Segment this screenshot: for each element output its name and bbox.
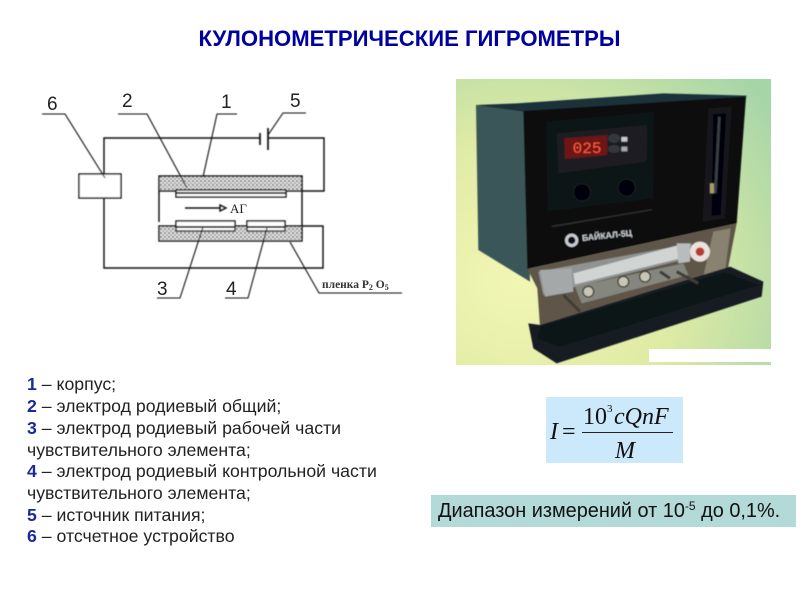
legend text: 6 – отсчетное устройство bbox=[27, 526, 235, 546]
housing top hatched bbox=[159, 176, 302, 191]
metal bar bbox=[538, 243, 695, 295]
title: КУЛОНОМЕТРИЧЕСКИЕ ГИГРОМЕТРЫ bbox=[198, 26, 621, 51]
housing walls bbox=[159, 191, 302, 226]
legend text bbox=[27, 374, 377, 546]
white strip bbox=[649, 349, 771, 362]
label: P2O5 film: 5 bbox=[385, 283, 389, 292]
legend text: 5 – источник питания; bbox=[27, 505, 205, 525]
label: P2O5 film: пленка P bbox=[322, 279, 369, 291]
diagram labels: 6 bbox=[47, 94, 58, 115]
electrode film lines bbox=[176, 193, 286, 227]
display recess bbox=[546, 112, 654, 212]
electrode 2 bbox=[176, 190, 286, 197]
red display bbox=[564, 135, 607, 159]
formula: 10 bbox=[583, 404, 607, 430]
control panel bbox=[575, 263, 688, 303]
photo background bbox=[456, 79, 771, 365]
formula bbox=[546, 397, 683, 463]
formula: cQnF bbox=[614, 404, 669, 430]
legend text: 2 – электрод родиевый общий; bbox=[27, 396, 281, 416]
electrode 4 bbox=[247, 221, 285, 231]
diagram labels: 4 bbox=[226, 279, 237, 300]
label: P2O5 film: O bbox=[373, 279, 385, 291]
wiring bbox=[104, 138, 324, 268]
clamp right bbox=[677, 243, 690, 263]
top edge bbox=[476, 93, 747, 112]
legend text: 1 – корпус; bbox=[27, 374, 116, 394]
front face bbox=[523, 97, 746, 269]
electrode 3 bbox=[176, 221, 235, 231]
box 6: readout device bbox=[79, 174, 121, 198]
divider bbox=[552, 209, 652, 227]
diagram labels bbox=[47, 91, 301, 300]
legend text: чувствительного элемента; bbox=[27, 483, 251, 503]
flowmeter bbox=[703, 107, 732, 222]
buttons bbox=[608, 134, 620, 143]
side panel bbox=[476, 105, 530, 282]
label: P2O5 film: 2 bbox=[369, 283, 373, 292]
gauge bbox=[690, 242, 710, 262]
icon: battery bbox=[260, 128, 268, 150]
device: 025 bbox=[573, 140, 601, 158]
legend text: чувствительного элемента; bbox=[27, 440, 251, 460]
measurement range callout: Диапазон измерений от 10-5 до 0,1%. bbox=[438, 499, 780, 522]
legend text: 4 – электрод родиевый контрольной части bbox=[27, 461, 377, 481]
arrow: gas flow bbox=[185, 205, 226, 211]
device photo bbox=[456, 79, 771, 365]
formula: = bbox=[562, 419, 576, 445]
diagram labels: 2 bbox=[122, 91, 133, 112]
brand bbox=[565, 234, 578, 247]
schematic diagram bbox=[42, 113, 402, 298]
housing bottom hatched bbox=[159, 226, 302, 241]
knobs bbox=[573, 184, 591, 201]
diagram labels: 3 bbox=[157, 279, 168, 300]
formula: I bbox=[549, 419, 559, 445]
lower compartment bbox=[527, 223, 737, 327]
device bbox=[476, 93, 763, 363]
leader lines bbox=[42, 113, 402, 298]
label: gas: АГ bbox=[230, 201, 247, 216]
clamp left bbox=[540, 268, 573, 297]
formula: 3 bbox=[607, 403, 613, 415]
diagram labels: 5 bbox=[290, 91, 301, 112]
legend text: 3 – электрод родиевый рабочей части bbox=[27, 418, 341, 438]
device: БАЙКАЛ-5Ц bbox=[581, 227, 633, 243]
measurement range callout bbox=[431, 495, 796, 527]
tray bbox=[528, 267, 763, 363]
diagram labels: 1 bbox=[221, 92, 232, 113]
